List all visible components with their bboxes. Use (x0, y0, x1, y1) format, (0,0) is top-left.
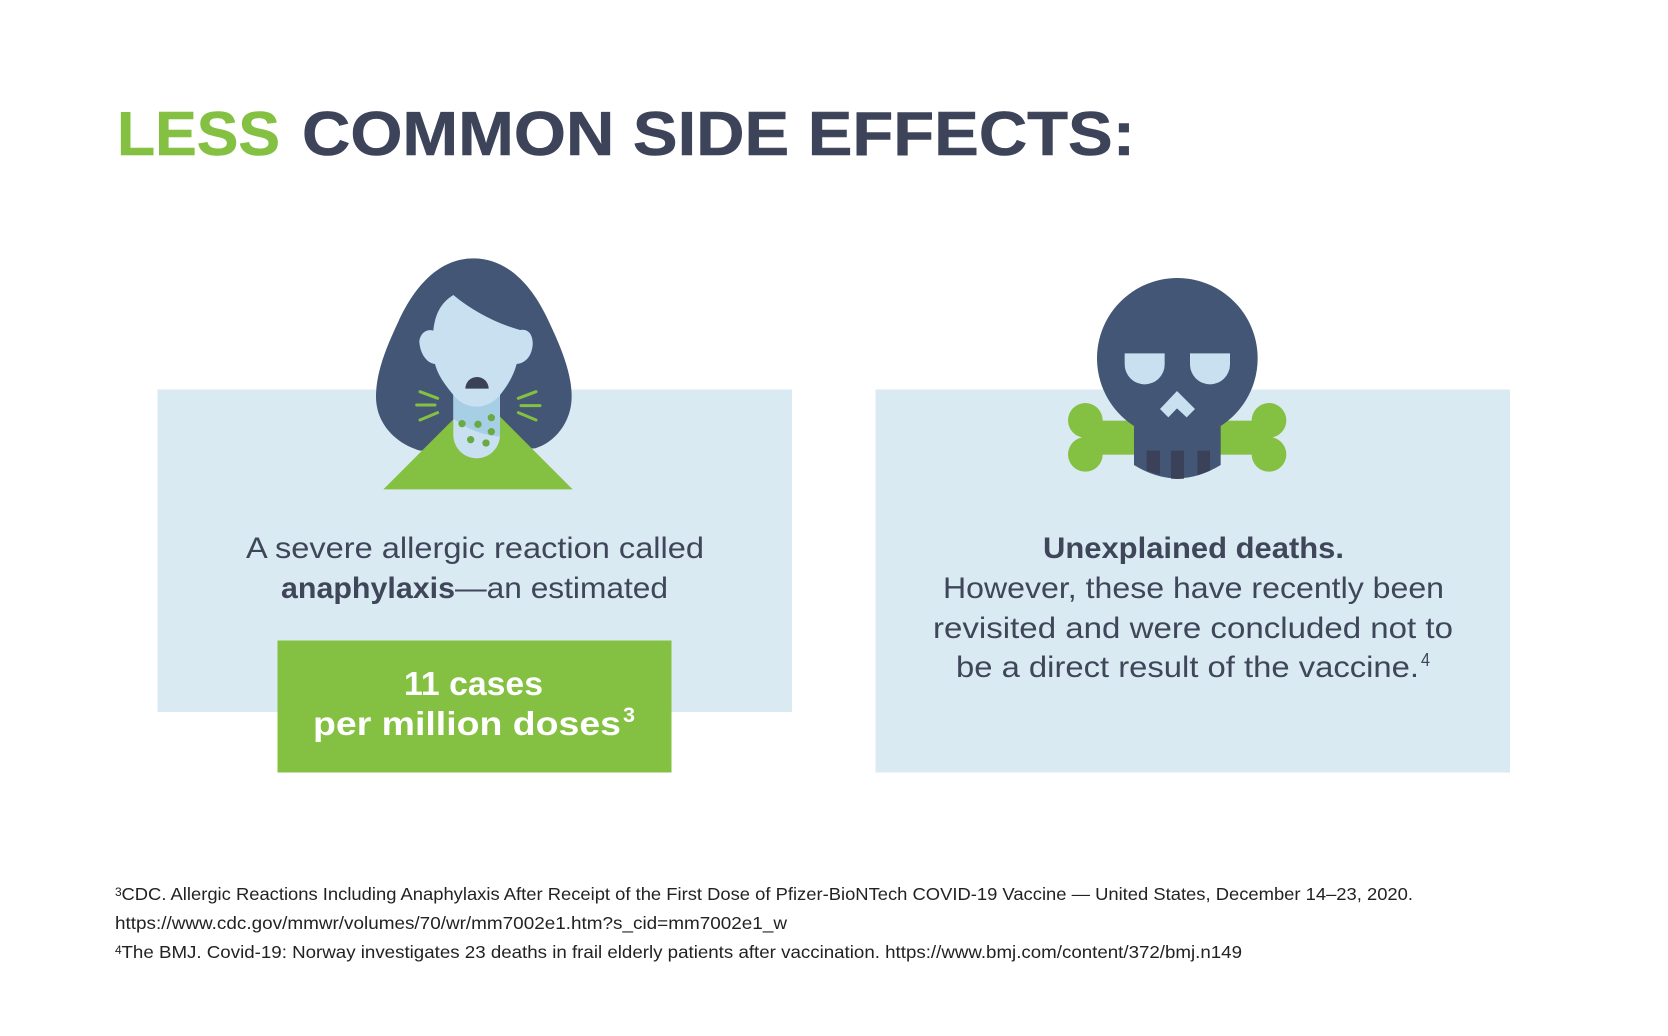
panel background: anaphylaxis (158, 390, 792, 712)
face (419, 295, 533, 407)
text: anaphylaxis description: anaphylaxis (281, 572, 455, 605)
text: unexplained deaths description: 4 (1421, 650, 1430, 670)
text: anaphylaxis description: A severe allergic reaction called (246, 532, 704, 565)
footnotes: 3 (115, 885, 122, 899)
rash dots (458, 414, 495, 447)
icon: woman with throat rash (376, 258, 573, 489)
callout: 11 cases per million doses: per million doses (313, 705, 621, 742)
mouth (465, 377, 489, 389)
torso triangle (383, 395, 573, 489)
nose (1160, 391, 1195, 417)
text: unexplained deaths description: Unexplained deaths. (1043, 532, 1344, 565)
skull (1097, 278, 1258, 478)
panel: anaphylaxis (158, 258, 792, 773)
text: unexplained deaths description: However, these have recently been (943, 572, 1444, 605)
panel: unexplained deaths (876, 278, 1510, 772)
hair (376, 258, 572, 451)
panel background: unexplained deaths (876, 390, 1510, 772)
neck shadow (453, 397, 500, 437)
crossbone (1068, 403, 1286, 472)
irritation lines (417, 392, 540, 420)
icon: skull and bones (1068, 278, 1286, 479)
neck (453, 387, 500, 458)
callout: 11 cases per million doses (278, 640, 672, 772)
footnotes: CDC. Allergic Reactions Including Anaphylaxis After Receipt of the First Dose of Pfizer-BioNTech COVID-19 Vaccine — United States, December 14–23, 2020. (122, 884, 1413, 904)
text: anaphylaxis description: —an estimated (455, 572, 668, 605)
text: unexplained deaths description: revisited and were concluded not to (933, 612, 1453, 645)
text: unexplained deaths description (933, 532, 1453, 684)
footnotes: 4 (115, 943, 122, 957)
callout: 11 cases per million doses: 3 (623, 704, 635, 727)
teeth (1147, 451, 1210, 479)
text: unexplained deaths description: be a direct result of the vaccine. (956, 651, 1419, 684)
footnotes: The BMJ. Covid-19: Norway investigates 23 deaths in frail elderly patients after vaccination. https://www.bmj.com/content/372/bmj.n149 (122, 942, 1242, 962)
title: COMMON SIDE EFFECTS: (302, 100, 1135, 169)
title: LESS (117, 100, 280, 169)
text: anaphylaxis description (246, 532, 704, 605)
callout: 11 cases per million doses: 11 cases (404, 665, 543, 702)
footnotes (115, 884, 1413, 962)
footnotes: https://www.cdc.gov/mmwr/volumes/70/wr/mm7002e1.htm?s_cid=mm7002e1_w (115, 913, 787, 934)
eye sockets (1125, 353, 1230, 384)
